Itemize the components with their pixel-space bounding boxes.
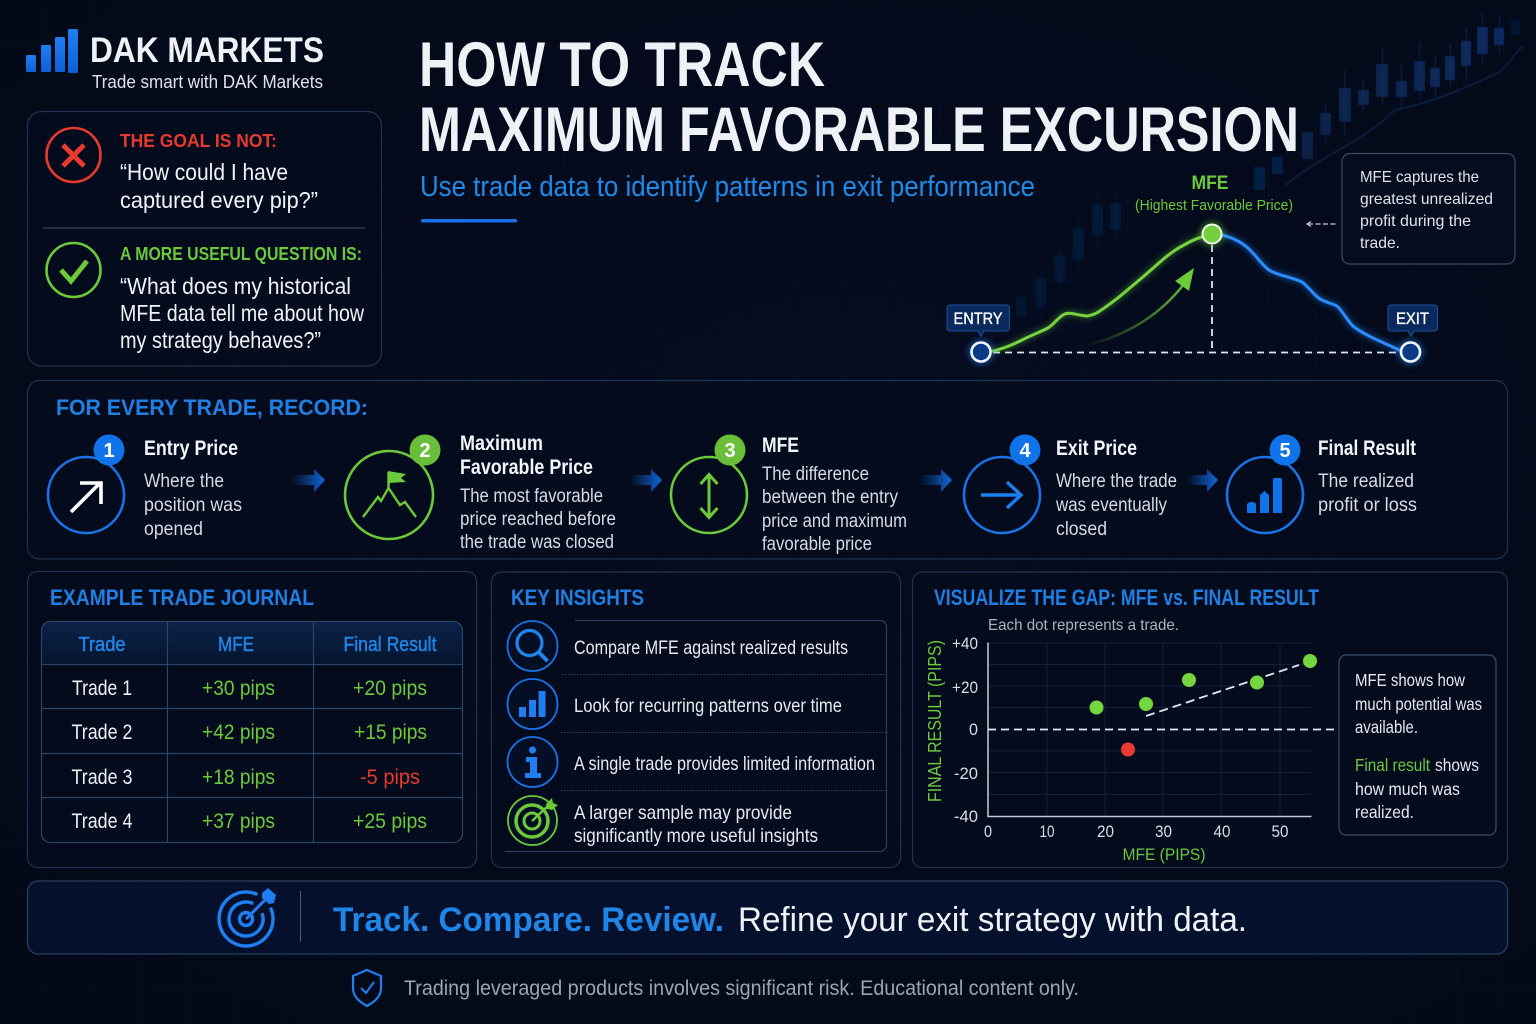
arrow: callout pointer <box>1307 222 1338 226</box>
subtitle: Use trade data to identify patterns in exit performance <box>420 171 1035 203</box>
step 3: MFE: between the entry <box>762 487 898 508</box>
MFE peak point <box>1199 221 1225 247</box>
y axis labels: +20 <box>952 678 978 697</box>
disclaimer text: Trading leveraged products involves significant risk. Educational content only. <box>404 977 1079 1000</box>
step 5: final result: profit or loss <box>1318 495 1417 516</box>
y axis labels <box>952 634 978 826</box>
chart explanation box: available. <box>1355 717 1418 737</box>
row: trade 4: +37 pips <box>202 810 275 833</box>
title: HOW TO TRACK <box>419 30 825 100</box>
step 1: entry price: 1 <box>103 440 115 462</box>
slogan <box>333 901 1247 939</box>
step 2: maximum favorable price: Favorable Price <box>460 456 593 479</box>
table header: Trade <box>78 633 126 656</box>
step 2: maximum favorable price: The most favorable <box>460 486 603 507</box>
step 4: exit price: 4 <box>1019 440 1031 462</box>
row: trade 3: -5 pips <box>360 766 420 789</box>
exit label: EXIT <box>1396 309 1429 328</box>
not-goal quote: captured every pip?” <box>120 187 318 213</box>
brand name: DAK MARKETS <box>90 31 324 70</box>
chart explanation box: how much was <box>1355 779 1460 799</box>
not-goal quote: “How could I have <box>120 159 288 185</box>
panel: for every trade record <box>28 380 1508 559</box>
chart explanation box: Final result <box>1355 755 1430 775</box>
icon: green check <box>46 243 100 297</box>
row: trade 2 <box>72 721 427 744</box>
x axis labels: 50 <box>1272 822 1288 841</box>
step 4: exit price <box>964 434 1177 540</box>
row: trade 1 <box>72 677 427 700</box>
panel: example trade journal <box>28 572 476 868</box>
step 4: exit price: Exit Price <box>1056 437 1137 460</box>
entry point <box>968 339 994 365</box>
y axis labels: -20 <box>954 764 978 783</box>
exit label <box>1388 305 1438 336</box>
x axis labels: 10 <box>1040 822 1054 841</box>
step 4: exit price: closed <box>1056 519 1107 540</box>
entry label: ENTRY <box>954 309 1002 328</box>
callout: MFE definition: greatest unrealized <box>1360 191 1493 208</box>
step 1: entry price: position was <box>144 495 242 516</box>
data points <box>1090 654 1317 756</box>
step 3: MFE: price and maximum <box>762 511 907 532</box>
step 4: exit price: was eventually <box>1055 495 1167 516</box>
not-goal quote <box>120 159 318 213</box>
MFE label: MFE <box>1192 173 1228 194</box>
panel: visualize the gap <box>912 572 1508 868</box>
x axis title: MFE (PIPS) <box>1122 845 1206 864</box>
heading: KEY INSIGHTS <box>511 585 644 610</box>
x axis labels: 30 <box>1155 822 1172 841</box>
step 2: maximum favorable price: price reached before <box>460 509 616 530</box>
scatter chart <box>925 634 1335 864</box>
heading: EXAMPLE TRADE JOURNAL <box>50 585 314 610</box>
chart explanation box: realized. <box>1355 802 1414 822</box>
arrow: step 3 to 4 <box>920 469 952 492</box>
callout: MFE definition: trade. <box>1360 235 1400 252</box>
x axis labels: 0 <box>984 822 992 841</box>
table header: Final Result <box>344 633 437 656</box>
chart note: Each dot represents a trade. <box>988 617 1179 634</box>
chart explanation box: MFE shows how <box>1355 670 1465 690</box>
not-goal heading: THE GOAL IS NOT: <box>120 131 277 151</box>
row: trade 2: +42 pips <box>202 721 275 744</box>
step 5: final result: 5 <box>1279 440 1291 462</box>
arrow: step 1 to 2 <box>292 469 325 492</box>
step 3: MFE: 3 <box>724 440 736 462</box>
blue falling line <box>1222 235 1399 350</box>
step 5: final result <box>1227 434 1417 533</box>
chart explanation box: shows <box>1435 755 1479 775</box>
MFE label: (Highest Favorable Price) <box>1135 197 1293 214</box>
logo: DAK Markets <box>26 29 324 92</box>
y axis labels: -40 <box>954 807 978 826</box>
footer: risk disclaimer <box>353 970 1079 1006</box>
insight: larger sample: significantly more useful insights <box>574 825 818 847</box>
row: trade 1: Trade 1 <box>72 677 132 700</box>
useful quote <box>120 273 364 353</box>
useful quote: MFE data tell me about how <box>120 300 364 326</box>
insight: compare: Compare MFE against realized results <box>574 637 848 659</box>
icon: target <box>219 888 276 946</box>
table header <box>78 633 437 656</box>
callout: MFE definition <box>1342 154 1515 264</box>
green rising line <box>993 234 1212 351</box>
title: MAXIMUM FAVORABLE EXCURSION <box>419 95 1299 165</box>
heading: FOR EVERY TRADE, RECORD: <box>56 395 368 420</box>
table header: MFE <box>218 633 254 656</box>
exit point <box>1398 339 1424 365</box>
step 5: final result: Final Result <box>1318 437 1416 460</box>
x axis labels: 40 <box>1214 822 1230 841</box>
step 1: entry price <box>48 434 242 540</box>
icon: shield <box>353 970 381 1006</box>
slogan: Track. Compare. Review. <box>333 901 724 939</box>
MFE label <box>1135 173 1293 214</box>
callout: MFE definition: profit during the <box>1360 213 1471 230</box>
y axis labels: 0 <box>969 720 978 739</box>
chart explanation box: much potential was <box>1355 694 1482 714</box>
row: trade 1: +20 pips <box>353 677 427 700</box>
y axis title: FINAL RESULT (PIPS) <box>925 640 945 802</box>
insight: patterns <box>508 679 842 729</box>
title <box>419 30 1299 165</box>
insight: larger sample <box>508 796 818 847</box>
insight: larger sample: A larger sample may provide <box>574 802 792 824</box>
row: trade 2: +15 pips <box>354 721 427 744</box>
step 1: entry price: Where the <box>144 471 224 492</box>
panel: key insights <box>492 572 900 868</box>
heading: VISUALIZE THE GAP: MFE vs. FINAL RESULT <box>934 585 1319 610</box>
chart: entry to MFE to exit price path <box>947 173 1438 365</box>
reference dashes <box>993 245 1400 352</box>
insight: patterns: Look for recurring patterns over time <box>574 695 842 717</box>
subtitle underline <box>421 219 517 222</box>
slogan: Refine your exit strategy with data. <box>738 901 1247 939</box>
banner: call to action <box>28 881 1508 954</box>
arrow: step 2 to 3 <box>630 469 662 492</box>
step 1: entry price: Entry Price <box>144 437 238 460</box>
step 3: MFE: favorable price <box>762 534 872 555</box>
upward arrow <box>1085 268 1194 345</box>
row: trade 4 <box>72 810 427 833</box>
row: trade 4: Trade 4 <box>72 810 133 833</box>
row: trade 3: +18 pips <box>202 766 275 789</box>
row: trade 2: Trade 2 <box>72 721 132 744</box>
step 3: MFE <box>671 434 907 555</box>
x axis labels <box>984 822 1288 841</box>
step 2: maximum favorable price: 2 <box>419 440 431 462</box>
entry label <box>947 305 1010 336</box>
useful quote: “What does my historical <box>120 273 351 299</box>
insight: compare <box>508 621 848 671</box>
step 2: maximum favorable price: Maximum <box>460 432 543 455</box>
row: trade 4: +25 pips <box>353 810 427 833</box>
step 5: final result: The realized <box>1318 471 1414 492</box>
step 2: maximum favorable price: the trade was closed <box>460 532 614 553</box>
step 3: MFE: The difference <box>762 464 869 485</box>
step 4: exit price: Where the trade <box>1056 471 1177 492</box>
tagline: Trade smart with DAK Markets <box>92 72 323 92</box>
row: trade 3: Trade 3 <box>72 766 132 789</box>
insight: limited information: A single trade provides limited information <box>574 753 875 775</box>
callout: MFE definition: MFE captures the <box>1360 169 1479 186</box>
row: trade 1: +30 pips <box>202 677 275 700</box>
row: trade 3 <box>72 766 420 789</box>
icon: rising bars logo <box>26 29 78 73</box>
step 1: entry price: opened <box>144 519 203 540</box>
table <box>42 622 462 842</box>
background candlestick chart <box>1016 13 1523 320</box>
x axis labels: 20 <box>1097 822 1114 841</box>
arrow: step 4 to 5 <box>1187 469 1218 492</box>
step 2: maximum favorable price <box>345 432 616 553</box>
icon: red cross <box>46 128 100 182</box>
useful heading: A MORE USEFUL QUESTION IS: <box>120 244 362 264</box>
y axis labels: +40 <box>952 634 978 653</box>
chart explanation box <box>1339 655 1496 835</box>
useful quote: my strategy behaves?” <box>120 327 321 353</box>
panel: goal question <box>28 112 382 366</box>
step 3: MFE: MFE <box>762 434 799 457</box>
insight: limited information <box>508 737 875 787</box>
